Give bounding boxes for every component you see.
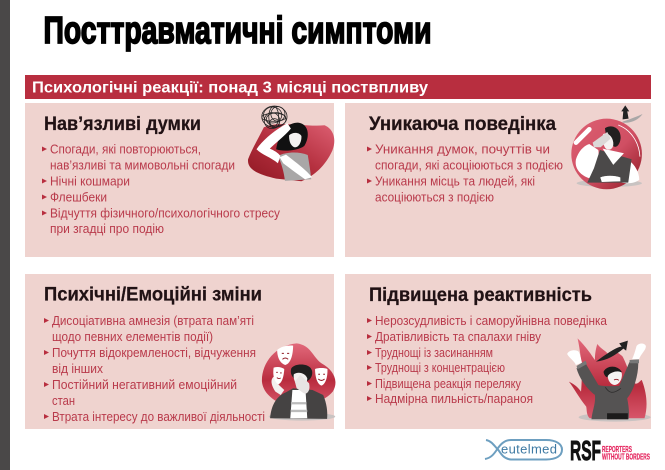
panel: avoidance xyxy=(345,103,651,257)
logo: eutelmed: eutelmed xyxy=(501,442,557,456)
symptom list: нав’язливі та мимовольні спогади xyxy=(50,158,235,172)
section banner: Психологічні реакції: понад 3 місяці поствпливу xyxy=(32,80,428,96)
logo: eutelmed xyxy=(485,440,562,460)
panel: heightened reactivity xyxy=(345,274,651,429)
symptom list xyxy=(42,142,281,236)
symptom list: Труднощі із засинанням xyxy=(375,346,493,360)
symptom list: Почуття відокремленості, відчуження xyxy=(52,346,256,360)
symptom list: щодо певних елементів події) xyxy=(52,330,213,344)
logo: Reporters Without Borders: RSF xyxy=(570,435,601,466)
symptom list: Уникання місць та людей, які xyxy=(375,174,535,188)
symptom list: Спогади, які повторюються, xyxy=(50,142,201,156)
icon: man covering his eyes xyxy=(571,105,643,189)
symptom list: Втрата інтересу до важливої діяльності xyxy=(52,410,265,424)
symptom list: Дратівливість та спалахи гніву xyxy=(375,330,542,344)
icon: woman with tangled thoughts xyxy=(248,106,334,181)
heading: Підвищена реактивність xyxy=(369,285,592,306)
symptom list: Флешбеки xyxy=(50,190,107,204)
title: Посттравматичні симптоми xyxy=(44,10,432,52)
symptom list: Підвищена реакція переляку xyxy=(375,377,522,391)
symptom list: Дисоціативна амнезія (втрата пам’яті xyxy=(52,314,254,328)
symptom list: Нічні кошмари xyxy=(50,174,130,188)
left edge band xyxy=(0,0,10,470)
panel: intrusive thoughts xyxy=(25,103,334,257)
symptom list: Труднощі з концентрацією xyxy=(375,361,505,375)
heading: Уникаюча поведінка xyxy=(369,114,556,135)
symptom list: Уникання думок, почуттів чи xyxy=(375,142,550,156)
icon: angry man with flames xyxy=(567,338,651,422)
heading: Психічні/Емоційні зміни xyxy=(44,284,262,306)
symptom list: Надмірна пильність/параноя xyxy=(375,392,533,406)
logo: Reporters Without Borders: REPORTERS xyxy=(602,444,632,454)
symptom list: асоціюються з подією xyxy=(375,190,494,204)
symptom list: Постійний негативний емоційний xyxy=(52,378,237,392)
section banner xyxy=(25,75,651,99)
symptom list xyxy=(44,314,265,424)
symptom list: від інших xyxy=(52,362,104,376)
icon: man with masks xyxy=(262,343,335,421)
symptom list: стан xyxy=(52,394,75,408)
symptom list xyxy=(367,314,607,406)
symptom list: Нерозсудливість і саморуйнівна поведінка xyxy=(375,314,607,328)
symptom list xyxy=(367,142,563,204)
panel: mental and emotional changes xyxy=(25,274,335,429)
logo: Reporters Without Borders xyxy=(570,435,650,466)
symptom list: при згадці про подію xyxy=(50,222,164,236)
symptom list: спогади, які асоціюються з подією xyxy=(375,158,563,172)
symptom list: Відчуття фізичного/психологічного стресу xyxy=(50,206,281,220)
heading: Нав’язливі думки xyxy=(44,114,201,135)
